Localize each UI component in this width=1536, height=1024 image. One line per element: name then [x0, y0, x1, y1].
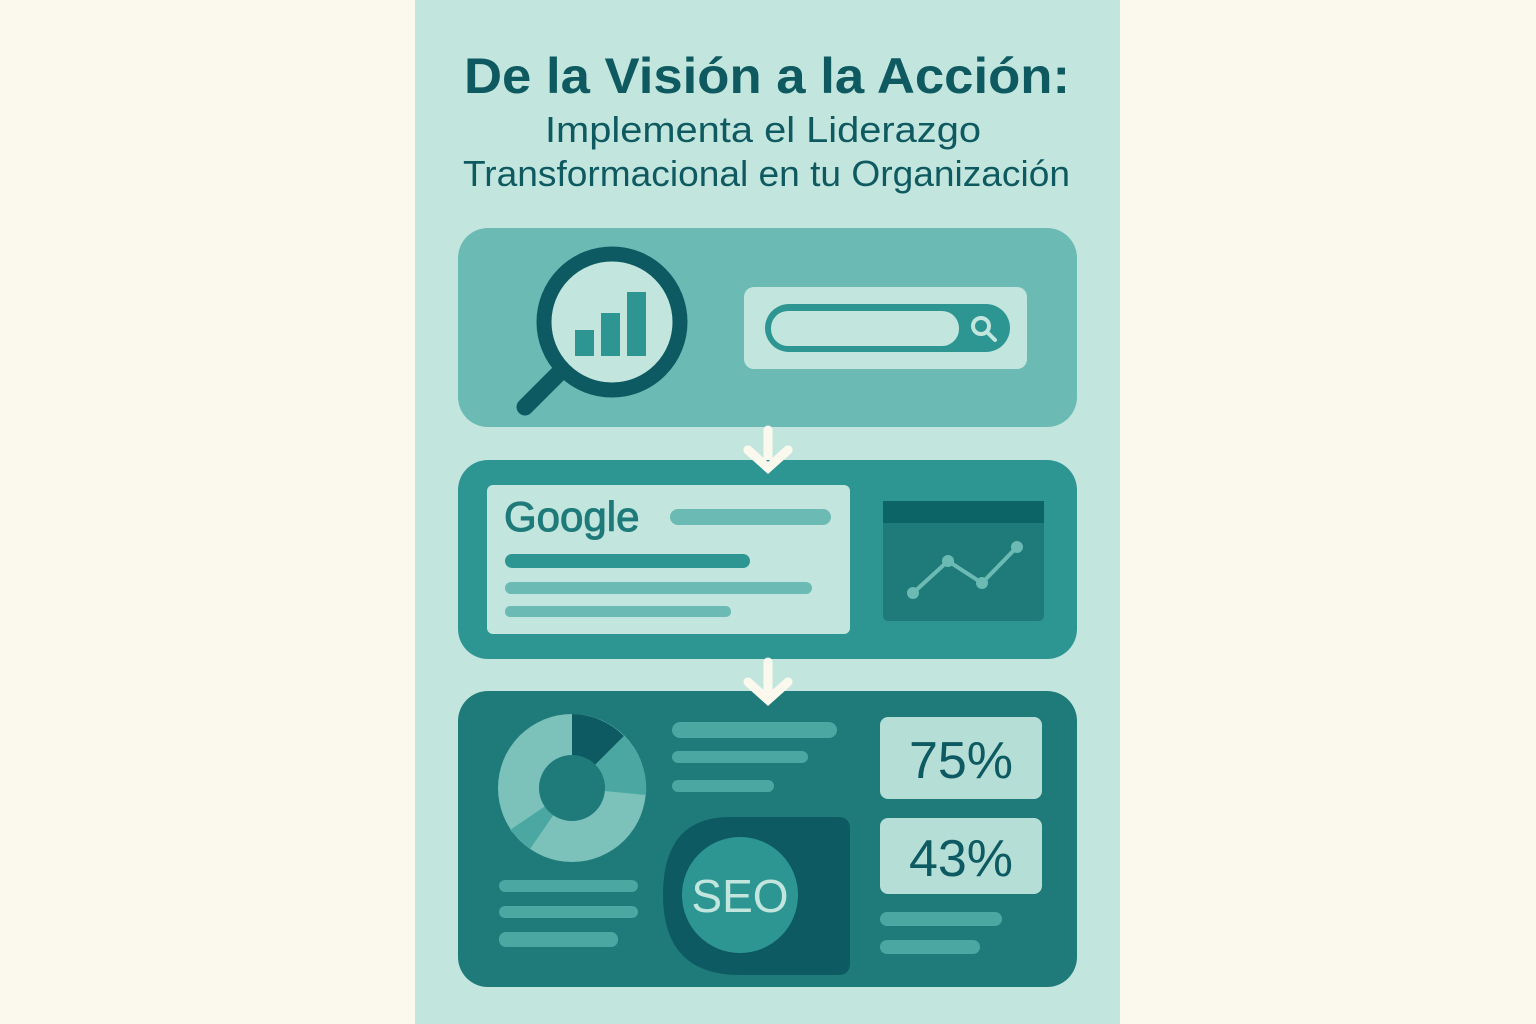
title	[463, 48, 1070, 194]
arrow 2	[748, 662, 788, 700]
donut chart	[498, 714, 646, 862]
stat 75%	[880, 717, 1042, 799]
search result card	[487, 485, 850, 634]
panel: google results	[458, 450, 1077, 659]
panel: research	[458, 228, 1077, 427]
subtitle: Implementa el Liderazgo	[545, 109, 981, 150]
arrow 1 head overlay	[748, 450, 788, 468]
title: De la Visión a la Acción:	[464, 48, 1070, 104]
panel: analytics	[458, 662, 1077, 987]
search result card: Google	[504, 493, 639, 540]
title: Transformacional en tu Organización	[463, 153, 1070, 194]
SEO badge	[663, 817, 850, 975]
stat 43%	[880, 818, 1042, 894]
search bar	[744, 287, 1027, 369]
arrow 1	[748, 430, 788, 468]
stat 43%: 43%	[909, 830, 1013, 888]
icon: magnifier with bars	[525, 254, 680, 407]
stat 75%: 75%	[909, 732, 1013, 790]
line chart window	[883, 501, 1044, 621]
text lines	[499, 722, 1002, 954]
SEO badge: SEO	[691, 870, 789, 922]
